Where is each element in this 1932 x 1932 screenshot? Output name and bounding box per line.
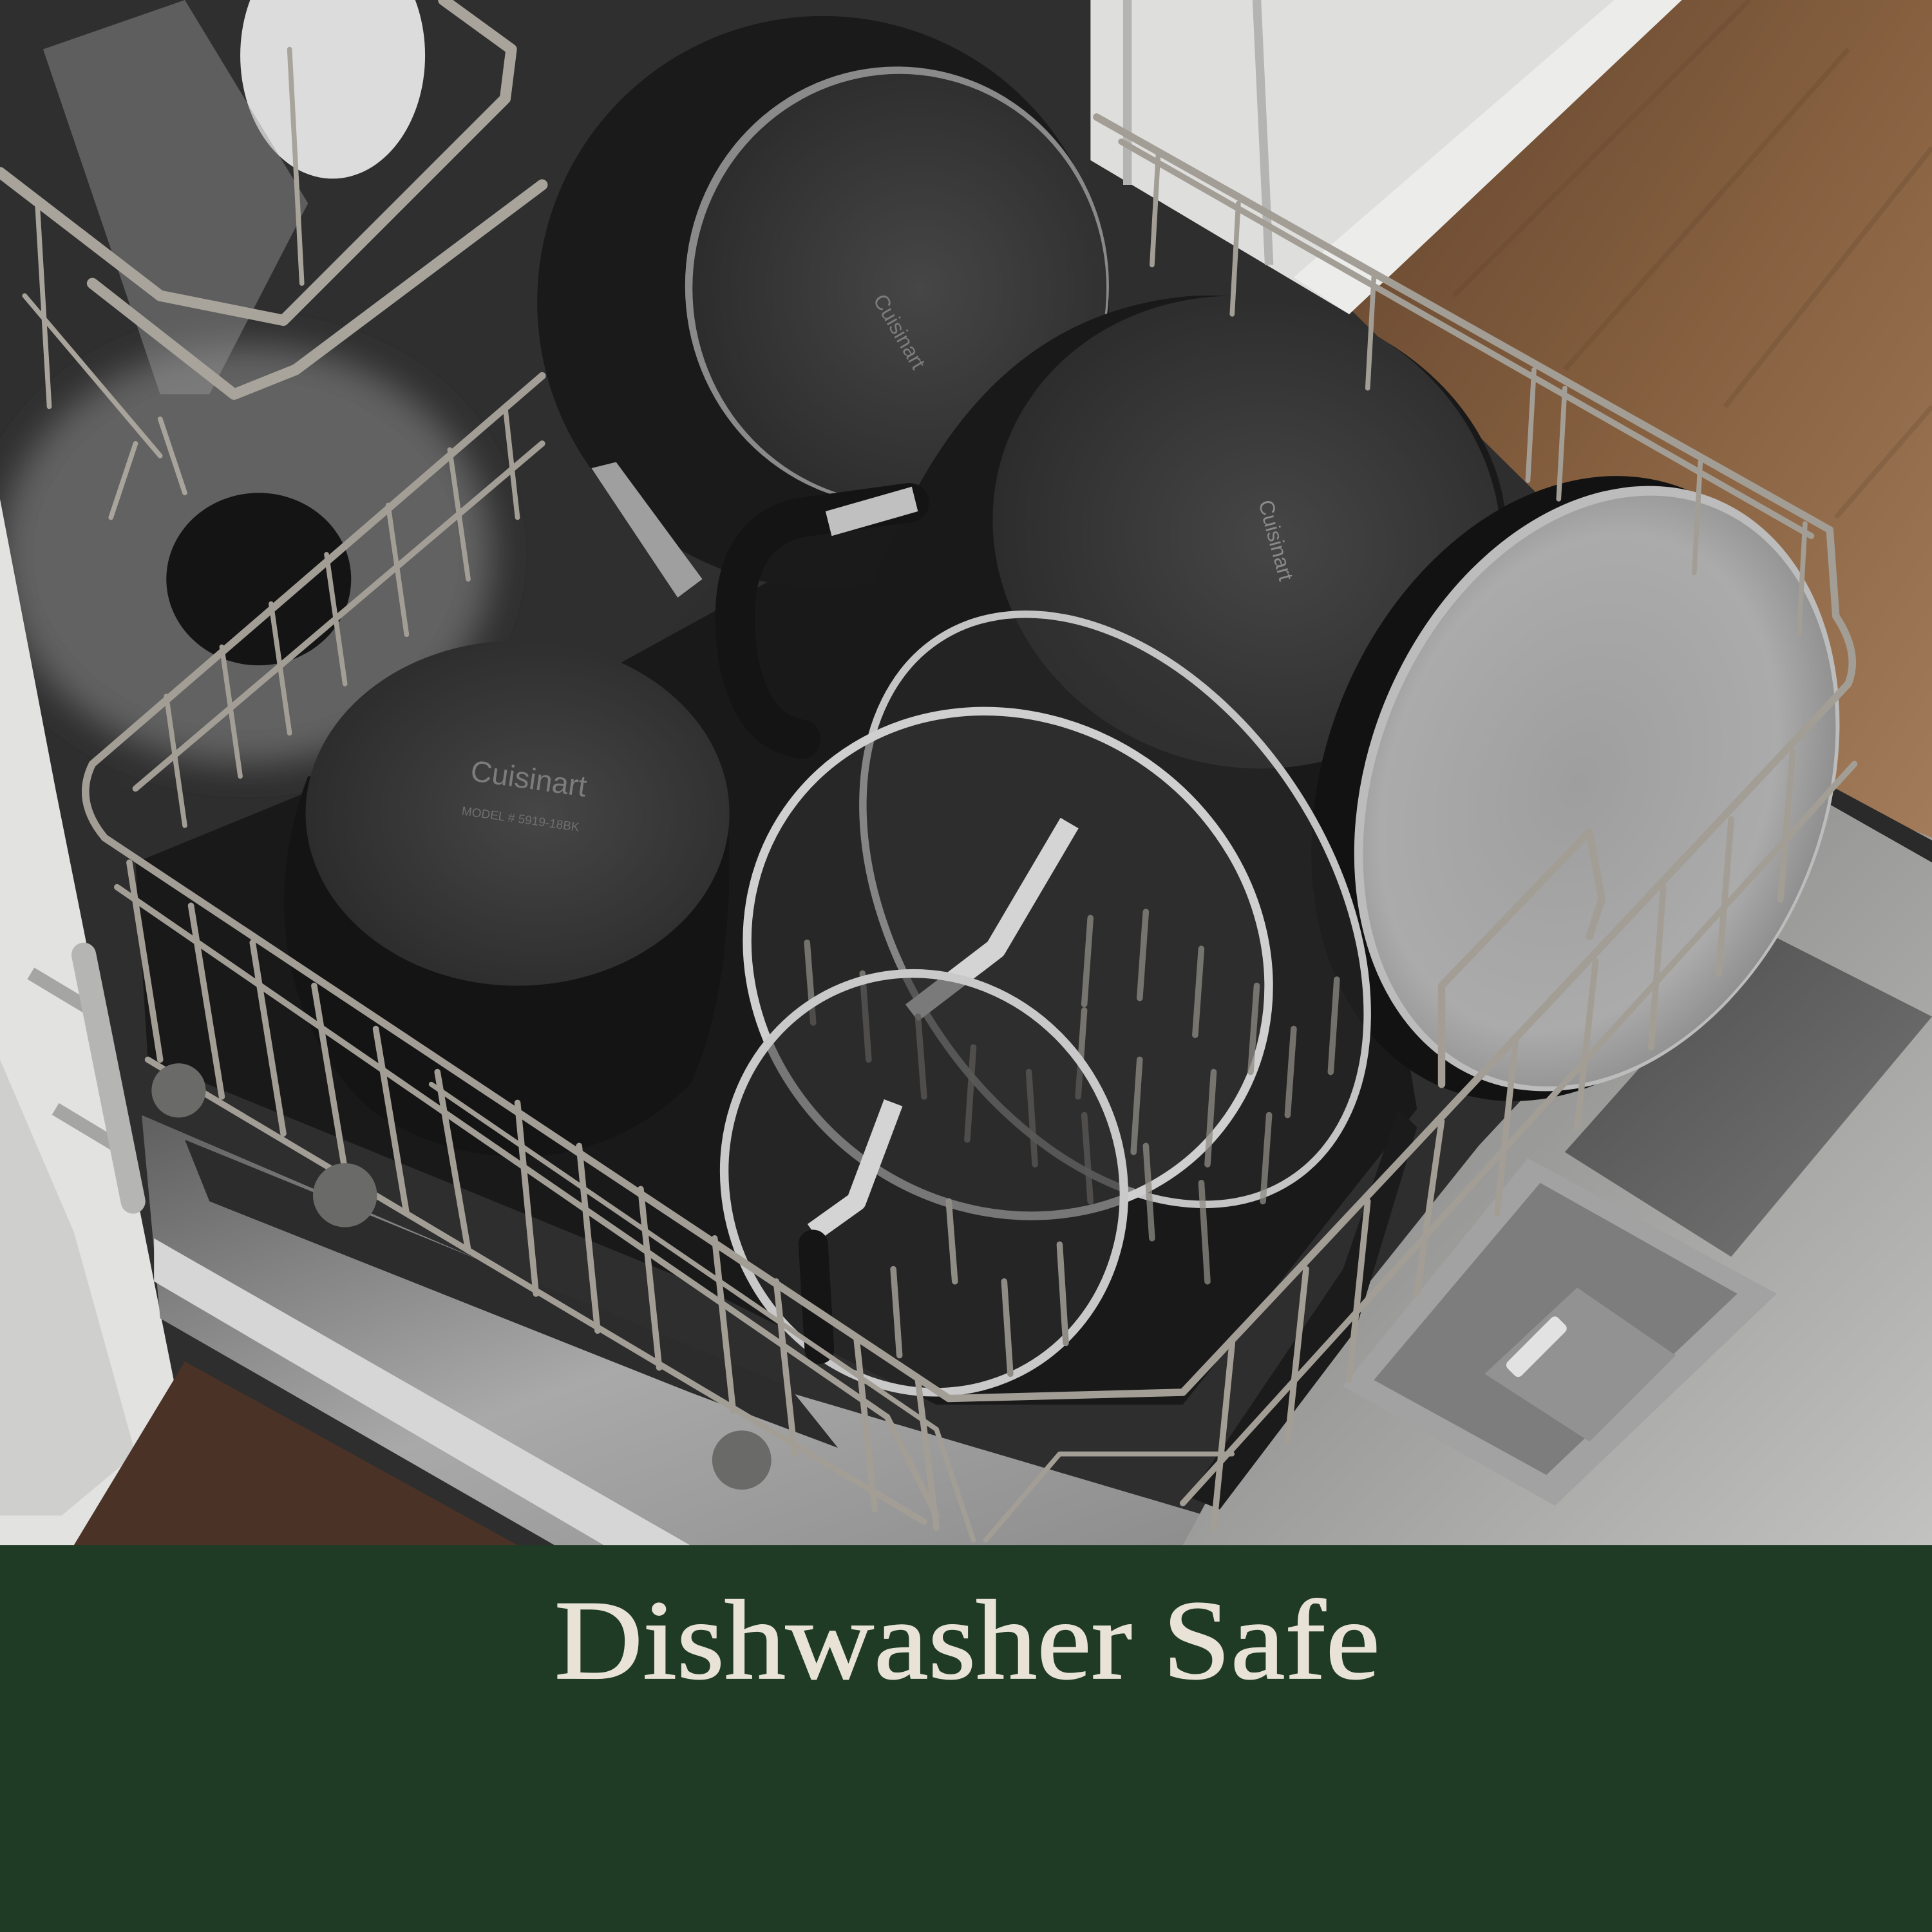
embossed logo: Cuisinart	[1254, 497, 1298, 583]
heading: Dishwasher Safe	[554, 1578, 1380, 1703]
glass lid: middle	[648, 610, 1368, 1318]
handle loop on rack	[1442, 831, 1602, 1084]
photo: dishwasher rack loaded with cookware	[0, 0, 1932, 1545]
door recess	[1565, 931, 1932, 1257]
footer band	[0, 1545, 1932, 1932]
wood floor, upper right	[1349, 0, 1932, 862]
cabinet door panel shadow	[0, 1059, 135, 1515]
wire rack	[86, 117, 1854, 1540]
embossed logo: Cuisinart	[869, 290, 930, 373]
rack base wires	[431, 1084, 1232, 1540]
rack uprights: front right side	[1214, 752, 1793, 1528]
pan handle rivets	[591, 462, 703, 598]
pan: middle right with handle	[735, 231, 1563, 838]
embossed model text: MODEL # 5919-18BK	[460, 804, 580, 835]
pot: left, upside down	[284, 641, 730, 1157]
pan: top centre, upside down	[457, 0, 1189, 668]
rack uprights: front side	[129, 862, 936, 1528]
dishwasher tub interior	[0, 0, 1090, 788]
door handle	[31, 955, 133, 1201]
glass lid: large back	[759, 521, 1472, 1298]
rack uprights: left side	[166, 406, 518, 826]
floor, lower left	[74, 1361, 518, 1545]
lid handle	[912, 823, 1070, 1013]
white cabinet	[1090, 0, 1682, 314]
dark tub floor behind rack	[135, 530, 1417, 1405]
white cabinet door, left	[0, 499, 185, 1545]
lower steel front of dishwasher	[142, 1115, 1306, 1545]
lid handle	[813, 1103, 893, 1232]
spindle nuts	[151, 1063, 772, 1490]
rack tines seen through the glass	[807, 912, 1337, 1282]
loop handle	[735, 503, 909, 739]
rack lower rails	[117, 142, 1854, 1522]
open door, steel	[1183, 788, 1932, 1545]
rack uprights: back right side	[1152, 154, 1805, 634]
plates	[240, 0, 425, 178]
glass lid: small front	[656, 907, 1192, 1458]
door top edge	[1824, 788, 1932, 862]
glass tumbler	[43, 0, 308, 394]
frying pan: right, ceramic interior	[1221, 399, 1927, 1178]
detergent dispenser	[1343, 1158, 1777, 1506]
pan handle under rack, front right	[1189, 1109, 1417, 1510]
dark channel along tub front	[185, 1140, 838, 1448]
rack upper rim	[86, 117, 1852, 1399]
upper rack	[0, 0, 542, 518]
embossed logo: Cuisinart	[469, 753, 589, 803]
